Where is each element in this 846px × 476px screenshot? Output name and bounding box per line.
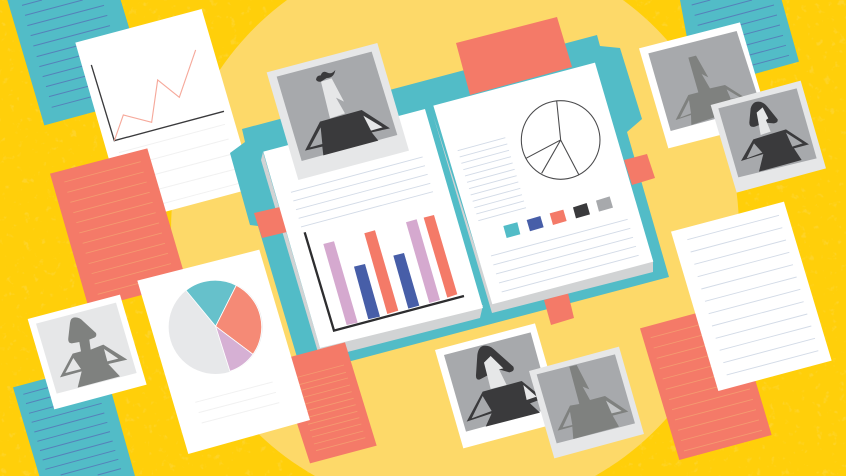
photo: woman bottom centre [435,323,563,448]
small coral document [277,342,377,463]
photo: man on left page [267,43,409,180]
white document with line chart [75,9,254,222]
text lines [291,157,433,227]
line chart axes [91,65,224,141]
pie chart [169,280,263,374]
right page with pie outline [433,63,653,304]
coral tab left [254,207,287,238]
coral tab top [456,17,572,95]
pie chart outline [521,101,600,179]
long text lines [491,219,639,292]
teal document top left [7,0,150,125]
photo: woman top right [711,81,826,193]
coral document left [50,148,187,309]
left page with bar chart [263,109,483,348]
line chart series [114,50,196,141]
photo: grey figure top right [639,22,769,148]
bar chart [305,215,464,331]
right page shadow [433,115,653,313]
text lines [195,382,279,423]
short text lines [458,138,526,221]
white lined document right [671,202,832,391]
left page shadow [261,152,483,359]
coral tab right [624,154,655,185]
coral document right [640,303,772,460]
teal document bottom left [13,363,135,476]
photo: grey figure bottom left [28,295,147,409]
legend colour squares [503,196,613,238]
teal folder [230,35,669,374]
white document with pie chart [137,250,310,454]
coral tab bottom [544,293,574,325]
photo: grey figure bottom centre [529,347,644,458]
teal document top right [680,0,799,90]
pale yellow circle [171,0,739,476]
